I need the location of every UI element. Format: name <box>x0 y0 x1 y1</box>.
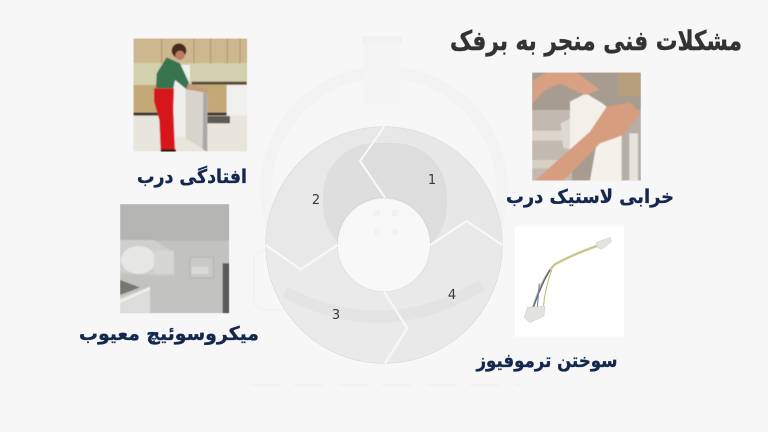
number 1: 1 <box>428 173 436 188</box>
background watermark <box>250 36 520 385</box>
label: burnt thermal fuse: سوختن ترموفیوز <box>476 350 618 372</box>
segment 3 <box>266 245 407 363</box>
number 2: 2 <box>312 193 320 208</box>
photo: thermal fuse wire <box>515 227 624 337</box>
label: faulty microswitch: میکروسوئیچ معیوب <box>79 323 259 345</box>
photo: faulty microswitch <box>120 204 229 313</box>
watermark showing through the donut <box>323 143 447 244</box>
segment 2 <box>266 127 385 269</box>
center watermark dots <box>374 210 398 235</box>
label: door sagging: افتادگی درب <box>137 165 247 188</box>
photo: man checking refrigerator door <box>133 38 247 152</box>
donut chart <box>266 127 502 363</box>
center hole <box>338 199 430 291</box>
segment gaps <box>266 127 502 363</box>
label: door gasket failure: خرابی لاستیک درب <box>506 186 674 208</box>
segment 1 <box>360 127 502 245</box>
segment 4 <box>384 221 502 363</box>
number 3: 3 <box>332 308 340 323</box>
number 4: 4 <box>448 288 456 303</box>
photo: door gasket <box>532 72 641 181</box>
